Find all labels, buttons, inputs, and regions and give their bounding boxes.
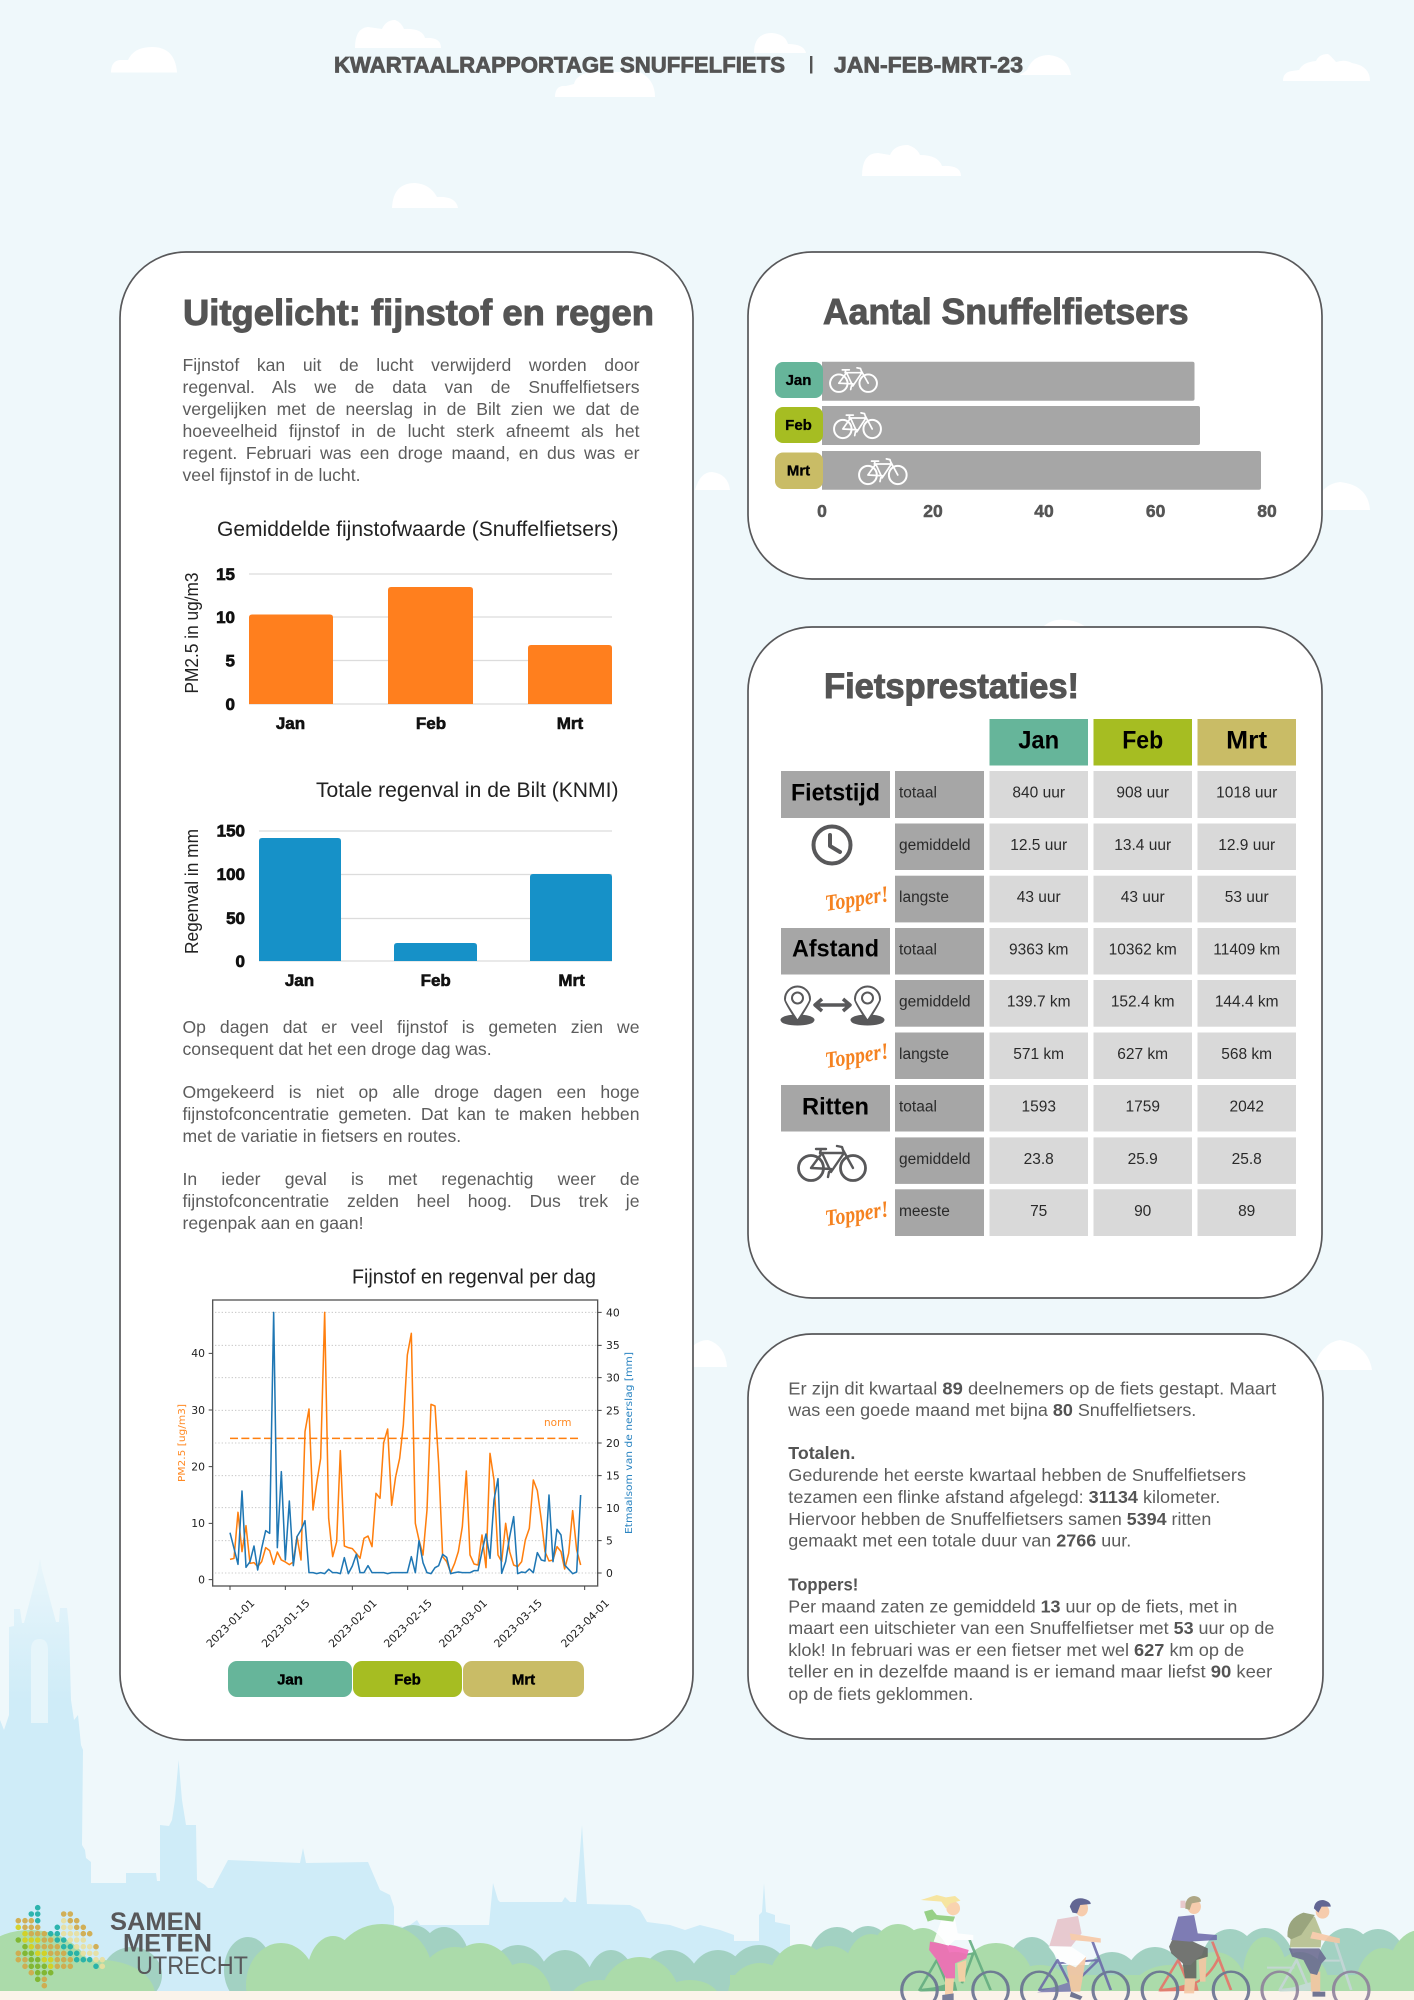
bar chart: totale regenval: Feb bbox=[421, 971, 451, 990]
horizontal bar chart: Jan bbox=[786, 372, 811, 389]
horizontal bar chart: Mrt bbox=[787, 462, 810, 480]
text block: omgekeerd: met de variatie in fietsers en routes. bbox=[182, 1126, 461, 1146]
text block: regenpak: fijnstofconcentratie zelden heel hoog. Dus trek je bbox=[182, 1191, 640, 1211]
table values: 25.9 bbox=[1128, 1151, 1158, 1168]
row sublabels: totaal bbox=[899, 1098, 937, 1116]
line chart: fijnstof en regenval per dag bbox=[177, 1266, 635, 1697]
row sublabels: langste bbox=[899, 889, 949, 906]
table values: 12.9 uur bbox=[1218, 837, 1275, 854]
line chart: fijnstof en regenval per dag: 30 bbox=[606, 1372, 620, 1384]
bar chart: totale regenval bbox=[182, 779, 618, 990]
line chart: fijnstof en regenval per dag: 0 bbox=[198, 1574, 205, 1586]
cyclist 2 bbox=[1022, 1898, 1129, 2000]
text block: regenpak: regenpak aan en gaan! bbox=[182, 1213, 363, 1233]
line chart: fijnstof en regenval per dag: PM2.5 [ug/m3] bbox=[177, 1404, 188, 1482]
summary text: Hiervoor hebben de Snuffelfietsers samen 5394 ritten bbox=[788, 1509, 1211, 1529]
text block: regenpak: In ieder geval is met regenachtig weer de bbox=[182, 1169, 640, 1189]
cyclist 4 bbox=[1262, 1900, 1369, 2000]
topper labels: Topper! bbox=[823, 1038, 890, 1073]
panel title: Fietsprestaties! bbox=[824, 667, 1079, 706]
chart title: Gemiddelde fijnstofwaarde (Snuffelfietsers) bbox=[217, 518, 618, 541]
month legend bar: Mrt bbox=[512, 1672, 535, 1688]
ground bbox=[0, 1991, 1414, 2000]
header title: KWARTAALRAPPORTAGE SNUFFELFIETS bbox=[334, 52, 785, 78]
table values: 908 uur bbox=[1116, 784, 1169, 802]
logo wordmark: UTRECHT bbox=[136, 1952, 248, 1980]
text block: intro fijnstof: regent. Februari was een droge maand, en dus was er bbox=[182, 443, 640, 463]
row sublabels: gemiddeld bbox=[899, 1151, 971, 1168]
clouds bbox=[111, 20, 1372, 1370]
table values: 12.5 uur bbox=[1010, 837, 1067, 854]
table values: 43 uur bbox=[1121, 889, 1165, 906]
bar chart: totale regenval: 100 bbox=[217, 865, 245, 884]
table values: 25.8 bbox=[1232, 1151, 1262, 1168]
topper labels bbox=[823, 881, 890, 1231]
line chart: fijnstof en regenval per dag: 0 bbox=[606, 1567, 613, 1580]
summary text: maart een uitschieter van een Snuffelfietser met 53 uur op de bbox=[788, 1618, 1274, 1638]
bar chart: gemiddelde fijnstofwaarde: 0 bbox=[226, 695, 235, 714]
logo wordmark: METEN bbox=[123, 1930, 212, 1958]
table values: 10362 km bbox=[1109, 942, 1177, 958]
horizontal bar chart: 40 bbox=[1034, 501, 1054, 521]
month legend bar bbox=[228, 1661, 584, 1697]
row sublabels: gemiddeld bbox=[899, 837, 971, 854]
bar chart: gemiddelde fijnstofwaarde: 15 bbox=[216, 565, 235, 584]
text block: intro fijnstof: vergelijken met de neerslag in de Bilt zien we dat de bbox=[182, 399, 640, 419]
line chart: fijnstof en regenval per dag: 20 bbox=[191, 1460, 205, 1474]
cyclist 1 bbox=[902, 1895, 1008, 2000]
text block: regenpak bbox=[182, 1169, 640, 1233]
summary text: Totalen. bbox=[788, 1443, 855, 1463]
icon: dark bicycle bbox=[798, 1146, 866, 1180]
table values: 144.4 km bbox=[1215, 994, 1279, 1010]
horizontal bar chart: 60 bbox=[1146, 501, 1166, 521]
bar chart: gemiddelde fijnstofwaarde: Jan bbox=[276, 714, 305, 733]
table values: 90 bbox=[1134, 1203, 1152, 1220]
table bbox=[781, 719, 1296, 1236]
text block: omgekeerd: Omgekeerd is niet op alle droge dagen een hoge bbox=[182, 1082, 640, 1102]
line chart: fijnstof en regenval per dag: 30 bbox=[191, 1404, 205, 1417]
horizontal bar chart: 80 bbox=[1257, 501, 1277, 521]
table values: 43 uur bbox=[1017, 889, 1061, 906]
table header: Feb bbox=[1122, 726, 1163, 754]
table values: 11409 km bbox=[1213, 942, 1280, 958]
bar chart: totale regenval: Jan bbox=[285, 971, 314, 990]
line chart: fijnstof en regenval per dag: Etmaalsom van de neerslag [mm] bbox=[624, 1352, 635, 1534]
summary text: klok! In februari was er een fietser met wel 627 km op de bbox=[788, 1640, 1244, 1660]
text block: intro fijnstof: regenval. Als we de data van de Snuffelfietsers bbox=[182, 377, 640, 397]
summary text: gemaakt met een totale duur van 2766 uur. bbox=[788, 1531, 1131, 1551]
horizontal bar chart: 0 bbox=[817, 501, 827, 521]
month legend bar: Feb bbox=[394, 1672, 421, 1688]
summary text: op de fiets geklommen. bbox=[788, 1684, 973, 1704]
chart title: Fijnstof en regenval per dag bbox=[352, 1266, 596, 1288]
icons: white bicycles bbox=[830, 368, 907, 484]
topper labels: Topper! bbox=[823, 881, 890, 916]
bar chart: gemiddelde fijnstofwaarde: 10 bbox=[216, 608, 235, 627]
logo wordmark bbox=[110, 1908, 248, 1980]
table values: 2042 bbox=[1229, 1098, 1264, 1116]
table values: 1593 bbox=[1021, 1098, 1056, 1116]
topper labels: Topper! bbox=[823, 1196, 890, 1231]
table header bbox=[990, 719, 1296, 766]
table values: 152.4 km bbox=[1111, 994, 1175, 1010]
text block: intro fijnstof: veel fijnstof in de lucht. bbox=[182, 465, 360, 485]
summary text: tezamen een flinke afstand afgelegd: 31134 kilometer. bbox=[788, 1487, 1220, 1507]
row group labels: Ritten bbox=[802, 1094, 869, 1120]
line chart: fijnstof en regenval per dag: 2023-02-01 bbox=[326, 1597, 380, 1650]
icon: clock bbox=[814, 826, 850, 864]
panel: fietsprestaties bbox=[748, 627, 1322, 1298]
summary text: was een goede maand met bijna 80 Snuffelfietsers. bbox=[787, 1400, 1196, 1420]
line chart: fijnstof en regenval per dag: 2023-01-01 bbox=[204, 1597, 257, 1650]
bar chart: totale regenval: 150 bbox=[217, 822, 245, 840]
summary text: Per maand zaten ze gemiddeld 13 uur op de fiets, met in bbox=[788, 1597, 1237, 1617]
city skyline silhouette bbox=[0, 1558, 790, 1995]
table header: Mrt bbox=[1226, 726, 1268, 754]
bar chart: totale regenval: Mrt bbox=[558, 971, 585, 990]
month legend bar: Jan bbox=[277, 1672, 303, 1688]
bar chart: gemiddelde fijnstofwaarde: Feb bbox=[416, 714, 446, 733]
horizontal bar chart: 20 bbox=[923, 501, 943, 521]
row group labels: Fietstijd bbox=[791, 780, 880, 806]
summary text: Toppers! bbox=[788, 1575, 858, 1595]
table values: 53 uur bbox=[1225, 889, 1269, 906]
text block: omgekeerd bbox=[182, 1082, 640, 1146]
bar chart: gemiddelde fijnstofwaarde bbox=[182, 518, 618, 733]
row group labels bbox=[791, 780, 880, 1120]
logo dot map bbox=[18, 1908, 102, 1986]
line chart: fijnstof en regenval per dag: 5 bbox=[606, 1534, 613, 1548]
text block: droge dagen bbox=[182, 1016, 640, 1058]
table values: 627 km bbox=[1117, 1046, 1168, 1063]
table header: Jan bbox=[1018, 726, 1059, 754]
table values: 571 km bbox=[1013, 1046, 1064, 1063]
bar chart: gemiddelde fijnstofwaarde: Mrt bbox=[557, 714, 584, 733]
summary text: Er zijn dit kwartaal 89 deelnemers op de fiets gestapt. Maart bbox=[788, 1378, 1276, 1398]
line chart: fijnstof en regenval per dag: 35 bbox=[606, 1339, 620, 1352]
line chart: fijnstof en regenval per dag: norm bbox=[544, 1417, 571, 1429]
table values: 840 uur bbox=[1012, 784, 1065, 802]
bar chart: gemiddelde fijnstofwaarde: 5 bbox=[226, 652, 235, 670]
horizontal bar chart: Feb bbox=[785, 417, 812, 434]
line chart: fijnstof en regenval per dag: 2023-03-15 bbox=[491, 1597, 545, 1650]
text block: droge dagen: consequent dat het een droge dag was. bbox=[182, 1038, 492, 1058]
summary text: teller en in dezelfde maand is er iemand maar liefst 90 keer bbox=[788, 1662, 1272, 1682]
bar chart: gemiddelde fijnstofwaarde: PM2.5 in ug/m3 bbox=[182, 572, 202, 694]
row sublabels: gemiddeld bbox=[899, 994, 971, 1010]
line chart: fijnstof en regenval per dag: 25 bbox=[606, 1404, 620, 1418]
table values: 9363 km bbox=[1009, 942, 1068, 958]
logo wordmark: SAMEN bbox=[110, 1908, 202, 1936]
panel: aantal snuffelfietsers bbox=[748, 252, 1322, 579]
text block: intro fijnstof: Fijnstof kan uit de lucht verwijderd worden door bbox=[182, 355, 640, 375]
line chart: fijnstof en regenval per dag: 40 bbox=[606, 1306, 620, 1320]
line chart: fijnstof en regenval per dag: 15 bbox=[606, 1470, 620, 1482]
text block: droge dagen: Op dagen dat er veel fijnstof is gemeten zien we bbox=[182, 1016, 640, 1036]
panel title: Uitgelicht: fijnstof en regen bbox=[183, 292, 654, 333]
table values: 89 bbox=[1238, 1203, 1255, 1220]
logo: Samen Meten Utrecht bbox=[18, 1908, 248, 1986]
table values: 1018 uur bbox=[1216, 784, 1277, 802]
panel title: Aantal Snuffelfietsers bbox=[823, 291, 1188, 332]
text block: omgekeerd: fijnstofconcentratie gemeten. Dat kan te maken hebben bbox=[182, 1104, 640, 1124]
table values: 13.4 uur bbox=[1114, 837, 1171, 854]
text block: intro fijnstof bbox=[182, 355, 640, 485]
summary text: Gedurende het eerste kwartaal hebben de Snuffelfietsers bbox=[788, 1465, 1246, 1485]
table values: 23.8 bbox=[1024, 1151, 1054, 1168]
header title bbox=[334, 52, 1023, 78]
table values bbox=[1007, 784, 1280, 1220]
chart title: Totale regenval in de Bilt (KNMI) bbox=[316, 779, 618, 802]
summary text bbox=[787, 1378, 1276, 1704]
bar chart: totale regenval: Regenval in mm bbox=[182, 829, 202, 954]
panel: samenvatting bbox=[748, 1334, 1323, 1739]
header title: JAN-FEB-MRT-23 bbox=[834, 52, 1023, 78]
icon: distance between two pins bbox=[782, 986, 884, 1024]
table values: 1759 bbox=[1125, 1098, 1160, 1116]
trees bbox=[0, 1924, 1414, 2000]
row sublabels: totaal bbox=[899, 942, 937, 958]
row group labels: Afstand bbox=[792, 936, 879, 962]
cyclists bbox=[902, 1895, 1369, 2000]
bar chart: totale regenval: 0 bbox=[236, 952, 245, 971]
row sublabels: langste bbox=[899, 1046, 949, 1063]
line chart: fijnstof en regenval per dag: 2023-01-15 bbox=[259, 1597, 313, 1650]
line chart: fijnstof en regenval per dag: 2023-02-15 bbox=[381, 1597, 435, 1650]
bar chart: totale regenval: 50 bbox=[226, 909, 245, 928]
line chart: fijnstof en regenval per dag: 10 bbox=[191, 1517, 205, 1530]
line chart: fijnstof en regenval per dag: 40 bbox=[191, 1347, 205, 1360]
table values: 75 bbox=[1030, 1203, 1047, 1220]
table values: 139.7 km bbox=[1007, 994, 1071, 1010]
horizontal bar chart bbox=[775, 362, 1277, 521]
text block: intro fijnstof: hoeveelheid fijnstof in de lucht sterk afneemt als het bbox=[182, 421, 640, 441]
row sublabels: meeste bbox=[899, 1203, 950, 1220]
row sublabels: totaal bbox=[899, 784, 937, 802]
panel: uitgelicht fijnstof en regen bbox=[120, 252, 693, 1740]
line chart: fijnstof en regenval per dag: 10 bbox=[606, 1502, 620, 1515]
line chart: fijnstof en regenval per dag: 20 bbox=[606, 1437, 620, 1450]
line chart: fijnstof en regenval per dag: 2023-03-01 bbox=[436, 1597, 490, 1650]
table values: 568 km bbox=[1221, 1046, 1272, 1063]
cyclist 3 bbox=[1142, 1896, 1249, 2000]
line chart: fijnstof en regenval per dag: 2023-04-01 bbox=[558, 1597, 612, 1650]
row sublabels bbox=[899, 784, 971, 1220]
